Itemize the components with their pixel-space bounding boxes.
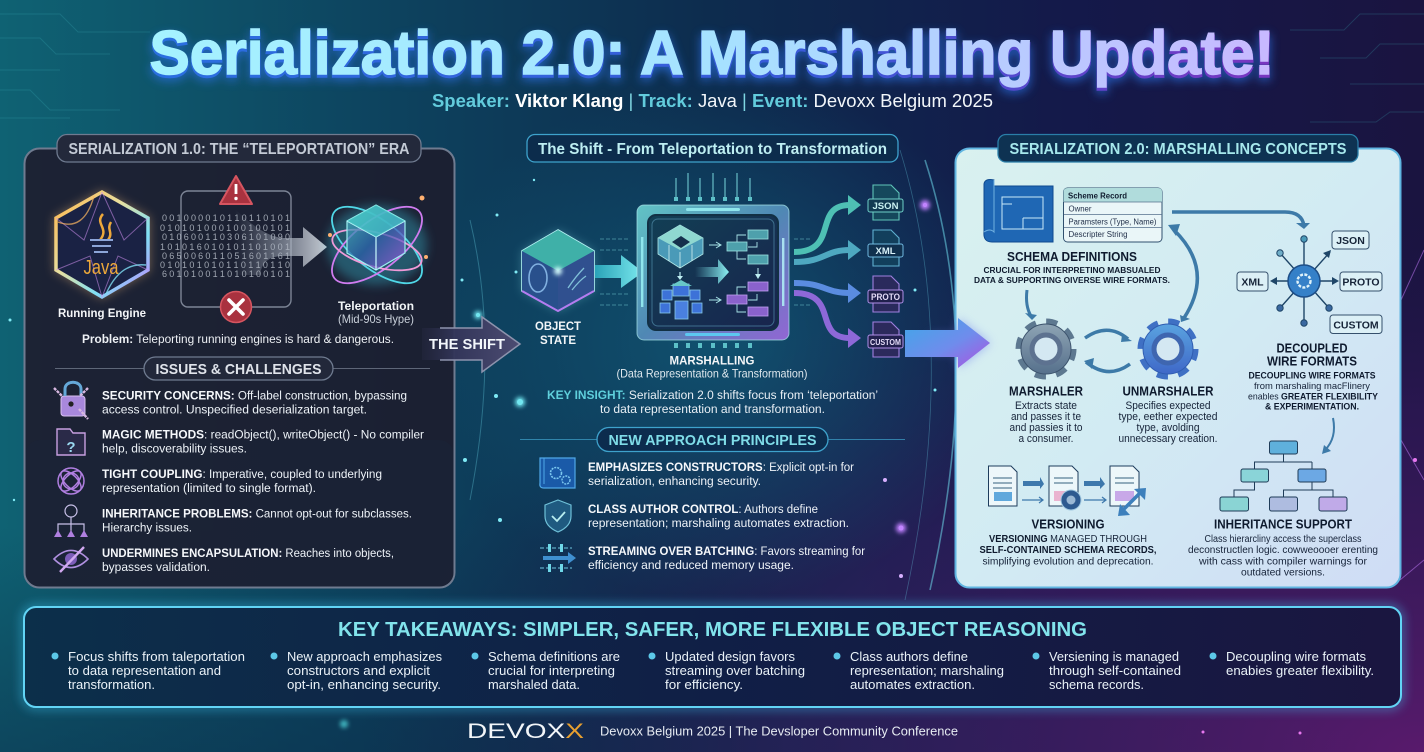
takeaway 5: representation; marshaling bbox=[850, 663, 1004, 678]
text: unmarshaler: type, avolding bbox=[1136, 422, 1200, 434]
takeaway 3: crucial for interpreting bbox=[488, 663, 615, 678]
frame: binary stream: 0 1 0 1 0 1 0 0 0 1 0 0 1 0 0 1 0 1 bbox=[160, 223, 290, 233]
text: decoupled wire formats: & EXPERIMENTATION. bbox=[1265, 402, 1359, 412]
icon: json file: JSON bbox=[872, 201, 899, 212]
title: Serialization 2.0: A Marshalling Update! bbox=[150, 24, 1274, 93]
takeaway 4 bbox=[648, 649, 805, 692]
takeaway 7: Decoupling wire formats bbox=[1226, 649, 1366, 664]
arrow: the shift: THE SHIFT bbox=[429, 337, 505, 353]
icon: marshaler gear bbox=[1019, 322, 1073, 376]
panel: key takeaways bbox=[24, 607, 1401, 707]
heading: serialization 2.0: SERIALIZATION 2.0: MARSHALLING CONCEPTS bbox=[1010, 141, 1346, 158]
text: schema definitions: SCHEMA DEFINITIONS bbox=[1007, 250, 1137, 264]
principle: emphasizes constructors: EMPHASIZES CONSTRUCTORS: Explicit opt-in for bbox=[588, 460, 854, 474]
diagram: wire format hub: PROTO bbox=[1342, 276, 1380, 288]
takeaway 3: marshaled data. bbox=[488, 677, 580, 692]
text: decoupled wire formats bbox=[1248, 342, 1379, 412]
icon: custom file bbox=[868, 322, 903, 357]
icon: java running engine: Java bbox=[84, 257, 119, 279]
label: object state: STATE bbox=[540, 333, 576, 347]
logo: devoxx: DEVO XX bbox=[467, 719, 584, 743]
text: key insight: to data representation and transformation. bbox=[600, 402, 825, 416]
text: versioning: SELF-CONTAINED SCHEMA RECORDS, bbox=[980, 545, 1157, 556]
takeaway 3 bbox=[472, 649, 620, 692]
takeaway 4: for efficiency. bbox=[665, 677, 743, 692]
text: versioning: simplifying evolution and deprecation. bbox=[982, 556, 1154, 568]
icon: blueprint bbox=[984, 180, 1053, 242]
heading: key takeaways: KEY TAKEAWAYS: SIMPLER, SAFER, MORE FLEXIBLE OBJECT REASONING bbox=[338, 619, 1087, 641]
takeaway 4: Updated design favors bbox=[665, 649, 795, 664]
text: schema definitions: DATA & SUPPORTING OIVERSE WIRE FORMATS. bbox=[974, 275, 1170, 285]
heading: the shift: The Shift - From Teleportation to Transformation bbox=[538, 141, 887, 158]
table: scheme record: Descripter String bbox=[1068, 230, 1128, 239]
heading: serialization 1.0: SERIALIZATION 1.0: THE “TELEPORTATION” ERA bbox=[68, 141, 410, 158]
principle: class author control: CLASS AUTHOR CONTROL: Authors define bbox=[588, 502, 818, 516]
text: key insight: KEY INSIGHT: Serialization 2.0 shifts focus from ‘teleportation’ bbox=[547, 388, 878, 402]
text: unmarshaler: type, eether expected bbox=[1118, 411, 1218, 423]
frame: binary stream: 0 0 1 0 0 0 0 1 0 1 1 0 1 1 0 1 0 1 bbox=[162, 213, 290, 223]
icon: error circle bbox=[220, 292, 252, 322]
takeaway 5: automates extraction. bbox=[850, 677, 975, 692]
issue: security concerns bbox=[54, 382, 407, 419]
label: teleportation: Teleportation bbox=[338, 300, 414, 313]
icon: crossed eye bbox=[54, 547, 88, 572]
takeaway 2 bbox=[270, 649, 442, 692]
takeaway 5 bbox=[834, 649, 1004, 692]
heading: the shift bbox=[527, 134, 898, 162]
title: Serialization 2.0: A Marshalling Update! bbox=[150, 22, 1274, 90]
issue: tight coupling: representation (limited to single format). bbox=[102, 481, 316, 495]
principle: emphasizes constructors bbox=[540, 458, 854, 488]
principle: class author control: representation; marshaling automates extraction. bbox=[588, 516, 849, 530]
diagram: wire format hub: CUSTOM bbox=[1333, 320, 1379, 332]
table: scheme record bbox=[1064, 188, 1162, 242]
principle: emphasizes constructors: serialization, enhancing security. bbox=[588, 474, 761, 488]
panel: serialization 1.0 bbox=[24, 134, 454, 588]
heading: new approach principles bbox=[520, 428, 905, 452]
label: teleportation: (Mid-90s Hype) bbox=[338, 313, 414, 326]
takeaway 4: streaming over batching bbox=[665, 663, 805, 678]
table: scheme record: Owner bbox=[1068, 204, 1092, 214]
icon: padlock bbox=[54, 382, 88, 419]
table: scheme record: Paramsters (Type, Name) bbox=[1068, 218, 1157, 226]
text: problem: Problem: Teleporting running engines is hard & dangerous. bbox=[82, 332, 394, 346]
icon: blueprint gears bbox=[540, 458, 575, 488]
text: inheritance support: Class hierarcliny access the superclass bbox=[1204, 534, 1362, 545]
text: footer credit: Devoxx Belgium 2025 | The Devsloper Community Conference bbox=[600, 724, 958, 738]
text: decoupled wire formats: enables GREATER FLEXIBILITY bbox=[1248, 392, 1379, 402]
frame: binary stream: 0 6 5 0 0 6 0 1 1 0 5 1 6 0 1 1 6 1 bbox=[162, 251, 290, 261]
label: object state: OBJECT bbox=[535, 319, 582, 333]
arrow: the shift bbox=[422, 317, 520, 372]
label: object state bbox=[535, 319, 582, 347]
text: schema definitions: CRUCIAL FOR INTERPRETINO MABSUALED bbox=[984, 265, 1160, 275]
text: marshaler: MARSHALER bbox=[1009, 384, 1083, 398]
text: decoupled wire formats: DECOUPLED bbox=[1276, 342, 1348, 356]
issue: undermines encapsulation: UNDERMINES ENCAPSULATION: Reaches into objects, bbox=[102, 546, 394, 560]
issue: security concerns: access control. Unspecified deserialization target. bbox=[102, 402, 367, 416]
issue: magic methods: MAGIC METHODS: readObject(), writeObject() - No compiler bbox=[102, 428, 424, 442]
icon: proto file: PROTO bbox=[871, 292, 900, 303]
takeaway 5: Class authors define bbox=[850, 649, 968, 664]
arrow: to inheritance bbox=[1322, 418, 1334, 454]
text: unmarshaler: UNMARSHALER bbox=[1122, 384, 1214, 398]
icon: object state cube bbox=[522, 230, 594, 311]
issue: inheritance problems bbox=[54, 505, 412, 537]
text: versioning bbox=[980, 518, 1157, 568]
frame: binary stream bbox=[160, 191, 291, 307]
footer bbox=[467, 719, 958, 743]
diagram: wire format hub bbox=[1237, 231, 1382, 334]
issue: tight coupling bbox=[58, 467, 382, 495]
arrows: schema flow bbox=[1025, 212, 1310, 372]
takeaway 1: transformation. bbox=[68, 677, 155, 692]
text: marshaler bbox=[1009, 384, 1083, 445]
text: inheritance support: deconstructlen logic. cowweoooer erenting bbox=[1188, 545, 1378, 556]
icon: xml file: XML bbox=[876, 246, 896, 257]
takeaway 6: Versiening is managed bbox=[1049, 649, 1179, 664]
arrow: into marshalling bbox=[595, 255, 643, 288]
takeaway 1 bbox=[52, 649, 245, 692]
icon: warning triangle bbox=[220, 176, 252, 204]
issue: inheritance problems: Hierarchy issues. bbox=[102, 520, 192, 534]
takeaway 2: New approach emphasizes bbox=[287, 649, 442, 664]
issue: magic methods bbox=[57, 428, 424, 456]
frame: binary stream: 0 1 0 6 0 0 1 1 0 3 0 6 1 0 1 0 9 0 bbox=[162, 232, 290, 242]
principle: streaming over batching bbox=[540, 544, 865, 572]
diagram: wire format hub: JSON bbox=[1336, 235, 1365, 247]
heading: issues and challenges: ISSUES & CHALLENGES bbox=[156, 361, 322, 378]
label: teleportation bbox=[338, 300, 414, 326]
principle: class author control bbox=[545, 500, 849, 532]
subtitle: Speaker: Viktor Klang | Track: Java | Event: Devoxx Belgium 2025 bbox=[432, 90, 993, 111]
label: marshalling: MARSHALLING bbox=[670, 354, 754, 368]
takeaway 2: constructors and explicit bbox=[287, 663, 430, 678]
label: marshalling bbox=[616, 354, 808, 380]
icon: custom file: CUSTOM bbox=[870, 337, 901, 347]
text: inheritance support bbox=[1188, 518, 1378, 578]
takeaway 1: Focus shifts from taleportation bbox=[68, 649, 245, 664]
takeaway 6: through self-contained bbox=[1049, 663, 1181, 678]
icon: json file bbox=[868, 185, 903, 220]
text: key insight bbox=[547, 388, 878, 416]
principle: streaming over batching: STREAMING OVER BATCHING: Favors streaming for bbox=[588, 544, 865, 558]
takeaway 6 bbox=[1032, 649, 1181, 692]
panel: the shift bbox=[520, 134, 905, 572]
principle: streaming over batching: efficiency and reduced memory usage. bbox=[588, 558, 794, 572]
diagram: wire format hub: XML bbox=[1241, 276, 1264, 288]
text: inheritance support: outdated versions. bbox=[1241, 568, 1325, 578]
takeaway 7: enabies greater flexibility. bbox=[1226, 663, 1374, 678]
diagrams bbox=[727, 230, 768, 316]
issue: inheritance problems: INHERITANCE PROBLEMS: Cannot opt-out for subclasses. bbox=[102, 506, 412, 520]
cubes bbox=[658, 225, 703, 319]
text: inheritance support: with cass with compiler warnings for bbox=[1198, 556, 1368, 568]
text: marshaler: a consumer. bbox=[1018, 433, 1074, 445]
icon: folder question bbox=[57, 429, 85, 456]
text: unmarshaler: Specifies expected bbox=[1126, 400, 1211, 412]
text: decoupled wire formats: from marshaling macFlinery bbox=[1254, 381, 1370, 392]
label: running engine: Running Engine bbox=[58, 306, 146, 320]
takeaway 6: schema records. bbox=[1049, 677, 1144, 692]
middle arrows bbox=[695, 242, 729, 303]
diagram: inheritance tree bbox=[1220, 441, 1347, 511]
text: schema definitions bbox=[974, 250, 1170, 285]
text: marshaler: Extracts state bbox=[1015, 400, 1077, 412]
arrows: output formats bbox=[794, 195, 861, 348]
frame: binary stream: 0 1 0 1 0 1 0 1 0 1 1 0 1 1 0 1 1 0 bbox=[160, 260, 290, 270]
icon: xml file bbox=[868, 230, 903, 266]
text: inheritance support: INHERITANCE SUPPORT bbox=[1214, 518, 1352, 532]
icon: teleportation cube bbox=[320, 193, 434, 297]
icon: streaming arrow bbox=[540, 544, 576, 572]
text: unmarshaler bbox=[1118, 384, 1218, 445]
text: versioning: VERSIONING MANAGED THROUGH bbox=[989, 534, 1147, 545]
takeaway 2: opt-in, enhancing security. bbox=[287, 677, 441, 692]
issue: undermines encapsulation: bypasses validation. bbox=[102, 560, 210, 574]
frame: binary stream: 1 0 1 0 1 6 0 1 0 1 0 1 1 0 1 0 0 1 bbox=[160, 242, 290, 252]
takeaway 7 bbox=[1210, 649, 1374, 678]
icon: versioning documents bbox=[988, 466, 1146, 516]
heading: serialization 1.0 bbox=[57, 134, 421, 162]
panel: serialization 2.0 bbox=[956, 134, 1400, 588]
issue: magic methods: help, discoverability issues. bbox=[102, 442, 247, 456]
table: scheme record: Scheme Record bbox=[1068, 190, 1127, 200]
icon: hierarchy bbox=[54, 505, 88, 537]
heading: new approach principles: NEW APPROACH PRINCIPLES bbox=[608, 432, 816, 449]
heading: serialization 2.0 bbox=[998, 134, 1358, 162]
icon: shield check bbox=[545, 500, 571, 532]
text: decoupled wire formats: WIRE FORMATS bbox=[1267, 354, 1357, 368]
issue: tight coupling: TIGHT COUPLING: Imperative, coupled to underlying bbox=[102, 467, 382, 481]
issue: security concerns: SECURITY CONCERNS: Off-label construction, bypassing bbox=[102, 388, 407, 402]
frame: binary stream: 6 0 1 0 1 0 0 1 1 0 1 0 1 0 0 1 0 1 bbox=[162, 269, 290, 279]
arrow: into concepts bbox=[905, 318, 990, 368]
icon: marshalling chip bbox=[600, 173, 812, 348]
issue: undermines encapsulation bbox=[54, 546, 394, 574]
takeaway 3: Schema definitions are bbox=[488, 649, 620, 664]
icon: proto file bbox=[868, 276, 903, 312]
heading: issues and challenges bbox=[55, 357, 430, 380]
text: marshaler: and passes it te bbox=[1011, 411, 1081, 423]
icon: java running engine bbox=[54, 190, 150, 299]
label: marshalling: (Data Representation & Transformation) bbox=[616, 366, 808, 380]
icon: unmarshaler gear bbox=[1141, 322, 1195, 376]
title: Serialization 2.0: A Marshalling Update! bbox=[150, 19, 1274, 88]
takeaway 1: to data representation and bbox=[68, 663, 221, 678]
text: unmarshaler: unnecessary creation. bbox=[1118, 433, 1218, 445]
icon: knot bbox=[58, 468, 84, 494]
text: versioning: VERSIONING bbox=[1032, 518, 1104, 532]
text: marshaler: and passies it to bbox=[1010, 422, 1083, 434]
text: decoupled wire formats: DECOUPLING WIRE FORMATS bbox=[1248, 370, 1376, 382]
icon: folder question: ? bbox=[66, 439, 76, 456]
arrow: teleport bbox=[235, 209, 327, 275]
